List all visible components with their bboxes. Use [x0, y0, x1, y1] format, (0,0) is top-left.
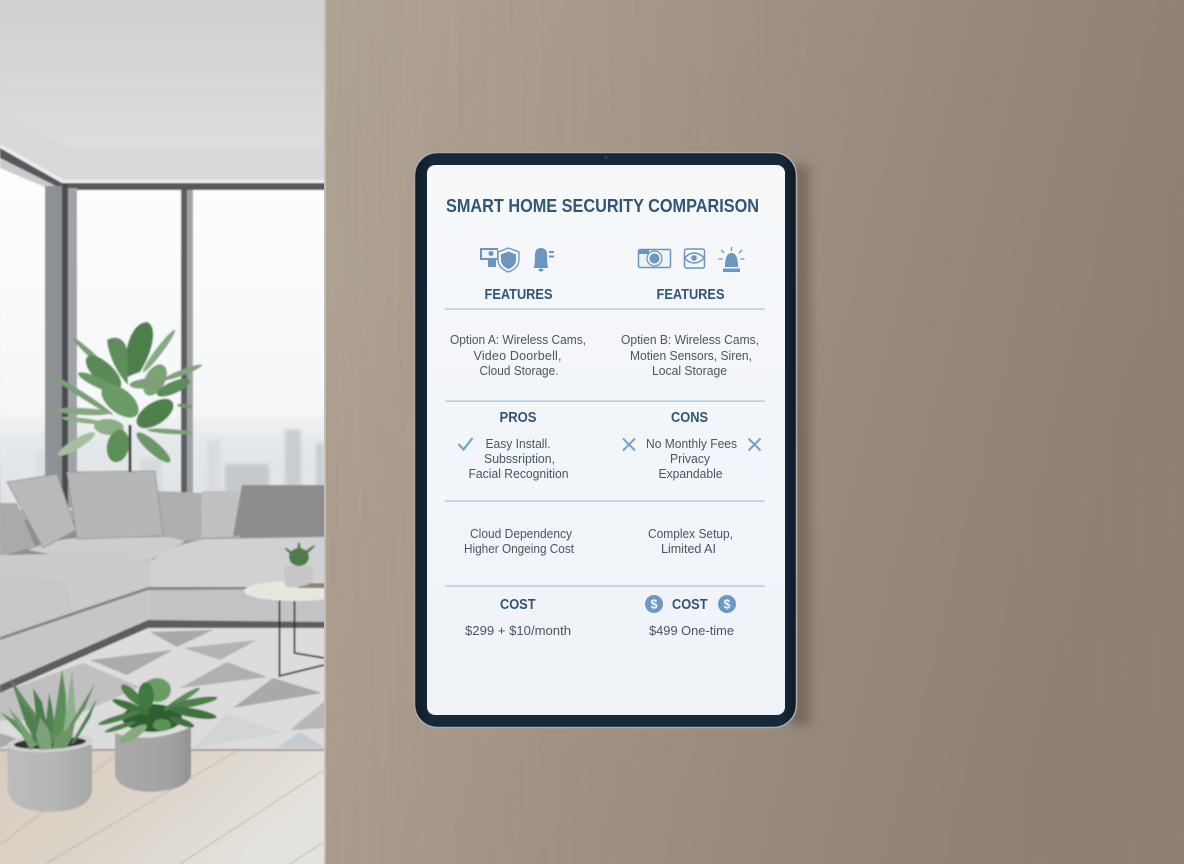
front seat cushion: [0, 573, 72, 638]
sofa back: [0, 520, 326, 560]
tablet bezel: [414, 152, 796, 728]
icon: camera: [638, 250, 670, 268]
cons text: No Monthly Fees: [646, 437, 737, 451]
features text: option A: Option A: Wireless Cams,: [450, 333, 586, 347]
cons heading: CONS: [671, 410, 708, 426]
rug: [0, 626, 326, 751]
floor: [0, 740, 326, 864]
drawbacks text: option A: Cloud Dependency: [470, 527, 573, 541]
tablet wall shadow: [790, 165, 810, 725]
title: SMART HOME SECURITY COMPARISON: [446, 196, 759, 216]
fiddle leaf plant: [48, 322, 203, 472]
icon: dollar coin right: $: [724, 598, 731, 612]
features text: option B: [621, 333, 759, 378]
background: room base tone: [0, 0, 326, 864]
drawbacks text: option B: Limited AI: [661, 542, 716, 556]
background: living room scene: [0, 0, 346, 864]
cons text: [646, 437, 737, 481]
features headings: [484, 287, 725, 303]
middle seat cushion: [0, 553, 148, 611]
tablet screen: [427, 165, 785, 715]
features headings: FEATURES: [656, 287, 725, 303]
cost heading: option B: COST: [672, 597, 708, 613]
sofa base: [0, 590, 148, 685]
pot and leafy plant: [97, 678, 218, 792]
sofa pillows: [7, 471, 326, 548]
drawbacks text: option A: Higher Ongeing Cost: [464, 542, 574, 556]
right seat cushion: [150, 537, 326, 587]
hazy city skyline: [35, 430, 324, 500]
features text: option A: Video Doorbell,: [474, 349, 562, 363]
features text: option B: Optien B: Wireless Cams,: [621, 333, 759, 347]
pros text: [468, 437, 569, 481]
icon: security camera: [480, 248, 498, 267]
price: option A: $299 + $10/month: [465, 624, 571, 638]
drawbacks text: option B: Complex Setup,: [648, 527, 733, 541]
icon: dollar coin left: [645, 595, 663, 613]
ceiling: [0, 0, 326, 147]
wood wall panel: [324, 0, 1184, 864]
icon: cross right: [748, 438, 760, 450]
pros text: Facial Recognition: [468, 467, 569, 481]
pot and aloe plant: [0, 669, 97, 812]
icon: motion sensor eye: [684, 249, 704, 268]
cost heading: option A: COST: [500, 597, 536, 613]
drawbacks text: option A: [464, 527, 574, 556]
icon: siren: [718, 247, 744, 272]
icon: check mark: [458, 438, 472, 450]
window glass: [0, 150, 326, 510]
camera dot: [604, 156, 608, 159]
icons: option A: [480, 248, 554, 272]
icon: dollar coin right: [718, 595, 736, 613]
tablet device: [414, 152, 796, 728]
icon: shield: [498, 248, 519, 272]
pros text: Easy Install.: [486, 437, 550, 451]
icon: dollar coin left: $: [651, 598, 658, 612]
rear seat cushion: [28, 537, 185, 560]
window frames: [0, 148, 326, 513]
cons text: Expandable: [658, 467, 723, 481]
features text: option B: Local Storage: [652, 364, 727, 378]
pros heading: PROS: [500, 410, 537, 426]
pros text: Subssription,: [484, 452, 555, 466]
price: option B: $499 One-time: [649, 624, 734, 638]
small table plant: [284, 542, 316, 587]
cons text: Privacy: [670, 452, 711, 466]
icon: doorbell: [534, 248, 554, 272]
drawbacks text: option B: [648, 527, 733, 556]
coffee table: [244, 581, 346, 676]
features text: option A: Cloud Storage.: [480, 364, 558, 378]
features headings: FEATURES: [484, 287, 553, 303]
floor plank lines: [0, 752, 324, 864]
icon: cross left: [623, 438, 635, 450]
features text: option A: [450, 333, 586, 378]
icons: option B: [638, 247, 744, 272]
features text: option B: Motien Sensors, Siren,: [630, 349, 752, 363]
ceiling soffit: [0, 111, 326, 181]
sofa: [0, 471, 326, 693]
